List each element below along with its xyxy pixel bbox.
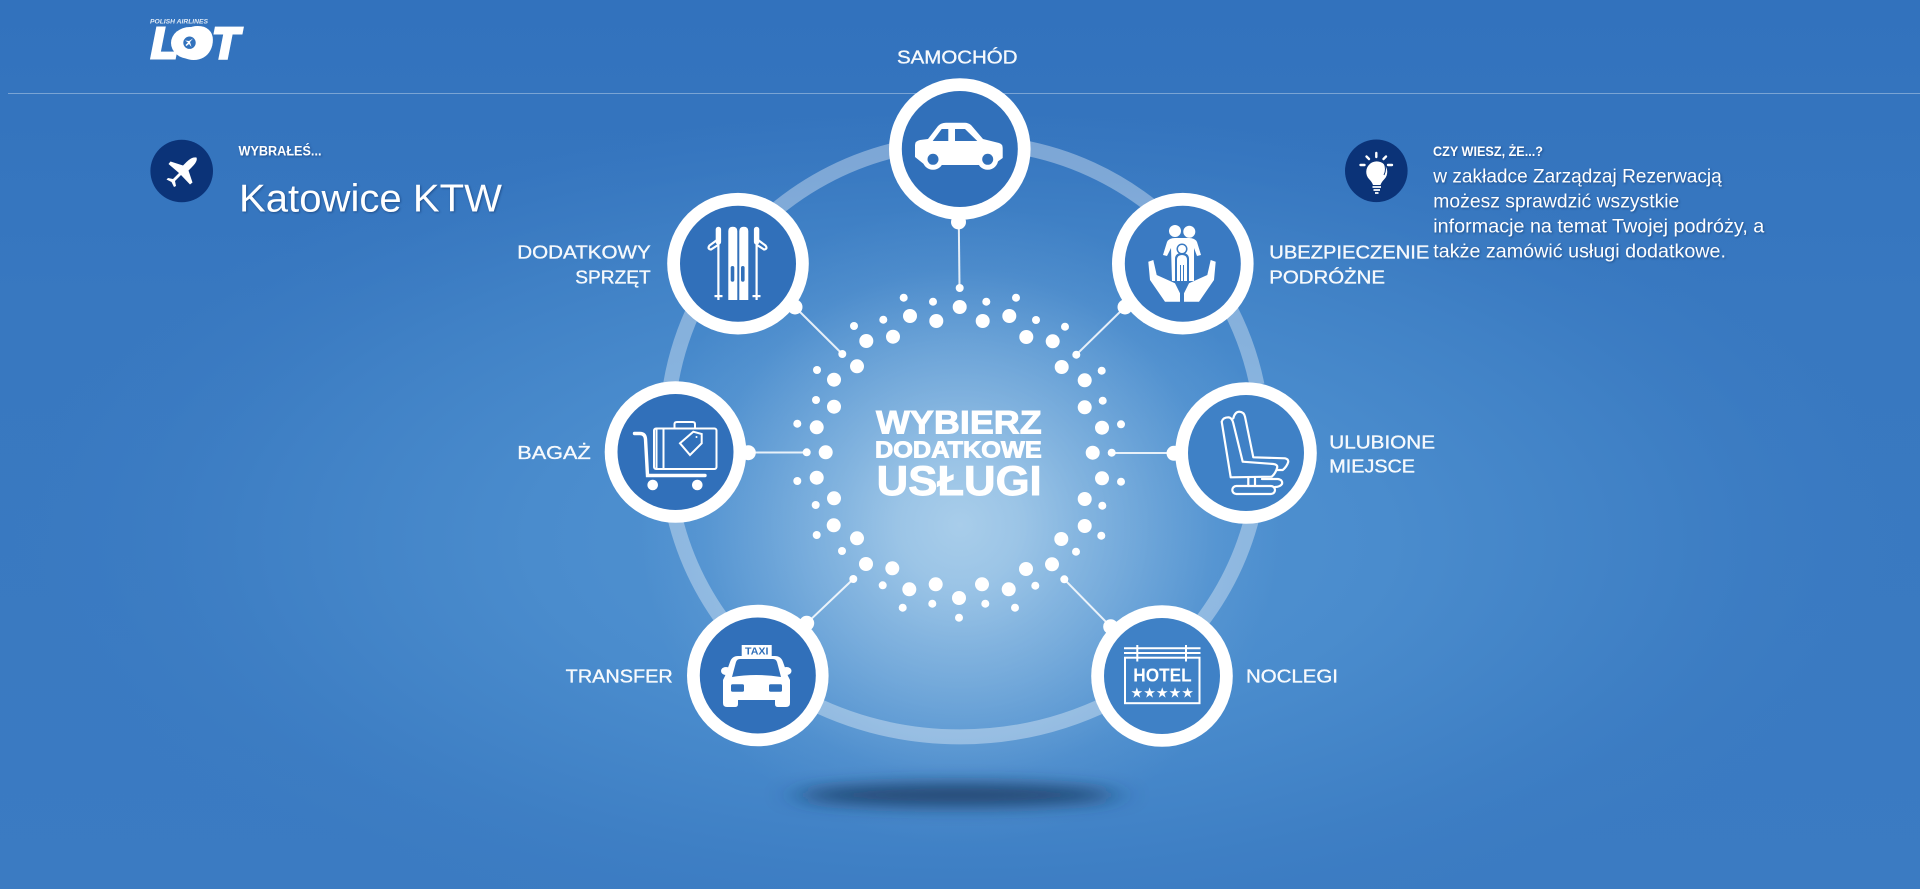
label: SPRZĘT <box>575 267 651 287</box>
central heading: DODATKOWE <box>875 437 1042 463</box>
label: DODATKOWY <box>517 243 651 263</box>
icon: skis and poles <box>709 227 766 300</box>
label: UBEZPIECZENIE <box>1269 242 1429 262</box>
connector lines <box>748 222 1174 627</box>
label <box>1329 432 1435 477</box>
eyebrow: did you know: CZY WIESZ, ŻE...? <box>1433 144 1543 159</box>
icon: car <box>915 123 1003 170</box>
tip text <box>1432 165 1764 262</box>
eyebrow: you selected: WYBRAŁEŚ... <box>238 144 322 159</box>
icon: taxi <box>721 645 792 707</box>
logo: LOT Polish Airlines: POLISH AIRLINES <box>150 18 209 26</box>
label: PODRÓŻNE <box>1269 266 1385 287</box>
icon: airplane <box>150 140 213 202</box>
ground shadow <box>797 783 1117 807</box>
label <box>517 243 651 287</box>
icon: taxi: TAXI <box>745 646 769 657</box>
central heading: WYBIERZ <box>876 404 1042 440</box>
icon: suitcase on cart <box>634 422 716 490</box>
icon: hotel sign: ★★★★★ <box>1130 686 1194 702</box>
tip text: w zakładce Zarządzaj Rezerwacją <box>1432 165 1722 187</box>
service: transfer <box>566 605 829 746</box>
label: SAMOCHÓD <box>897 46 1018 67</box>
panel: selected destination <box>150 140 502 221</box>
tip text: możesz sprawdzić wszystkie <box>1433 191 1679 213</box>
destination name: Katowice KTW <box>239 178 502 221</box>
service: accommodation <box>1091 605 1338 747</box>
icon: hotel sign: HOTEL <box>1133 665 1192 686</box>
dot ring <box>793 284 1125 622</box>
service: extra equipment <box>517 193 809 334</box>
service: travel insurance <box>1112 193 1429 334</box>
label: ULUBIONE <box>1329 432 1435 452</box>
label: MIEJSCE <box>1329 457 1415 477</box>
central heading: USŁUGI <box>877 457 1042 504</box>
label <box>1269 242 1429 287</box>
icon: hotel sign <box>1124 645 1200 703</box>
label: BAGAŻ <box>517 443 591 463</box>
service: baggage <box>517 381 756 523</box>
ring connecting services <box>669 147 1257 737</box>
panel: did you know <box>1345 140 1764 262</box>
icon: family in hands <box>1148 225 1216 302</box>
service: car <box>889 46 1031 229</box>
service: favourite seat <box>1166 382 1435 524</box>
label: TRANSFER <box>566 666 673 686</box>
header divider line <box>8 93 1920 94</box>
icon: light bulb <box>1345 140 1408 202</box>
logo: LOT Polish Airlines: LOT <box>151 19 242 68</box>
icon: airplane seats <box>1222 412 1288 494</box>
tip text: informacje na temat Twojej podróży, a <box>1433 216 1764 238</box>
label: NOCLEGI <box>1246 666 1338 686</box>
tip text: także zamówić usługi dodatkowe. <box>1433 240 1726 262</box>
central heading <box>875 404 1042 504</box>
